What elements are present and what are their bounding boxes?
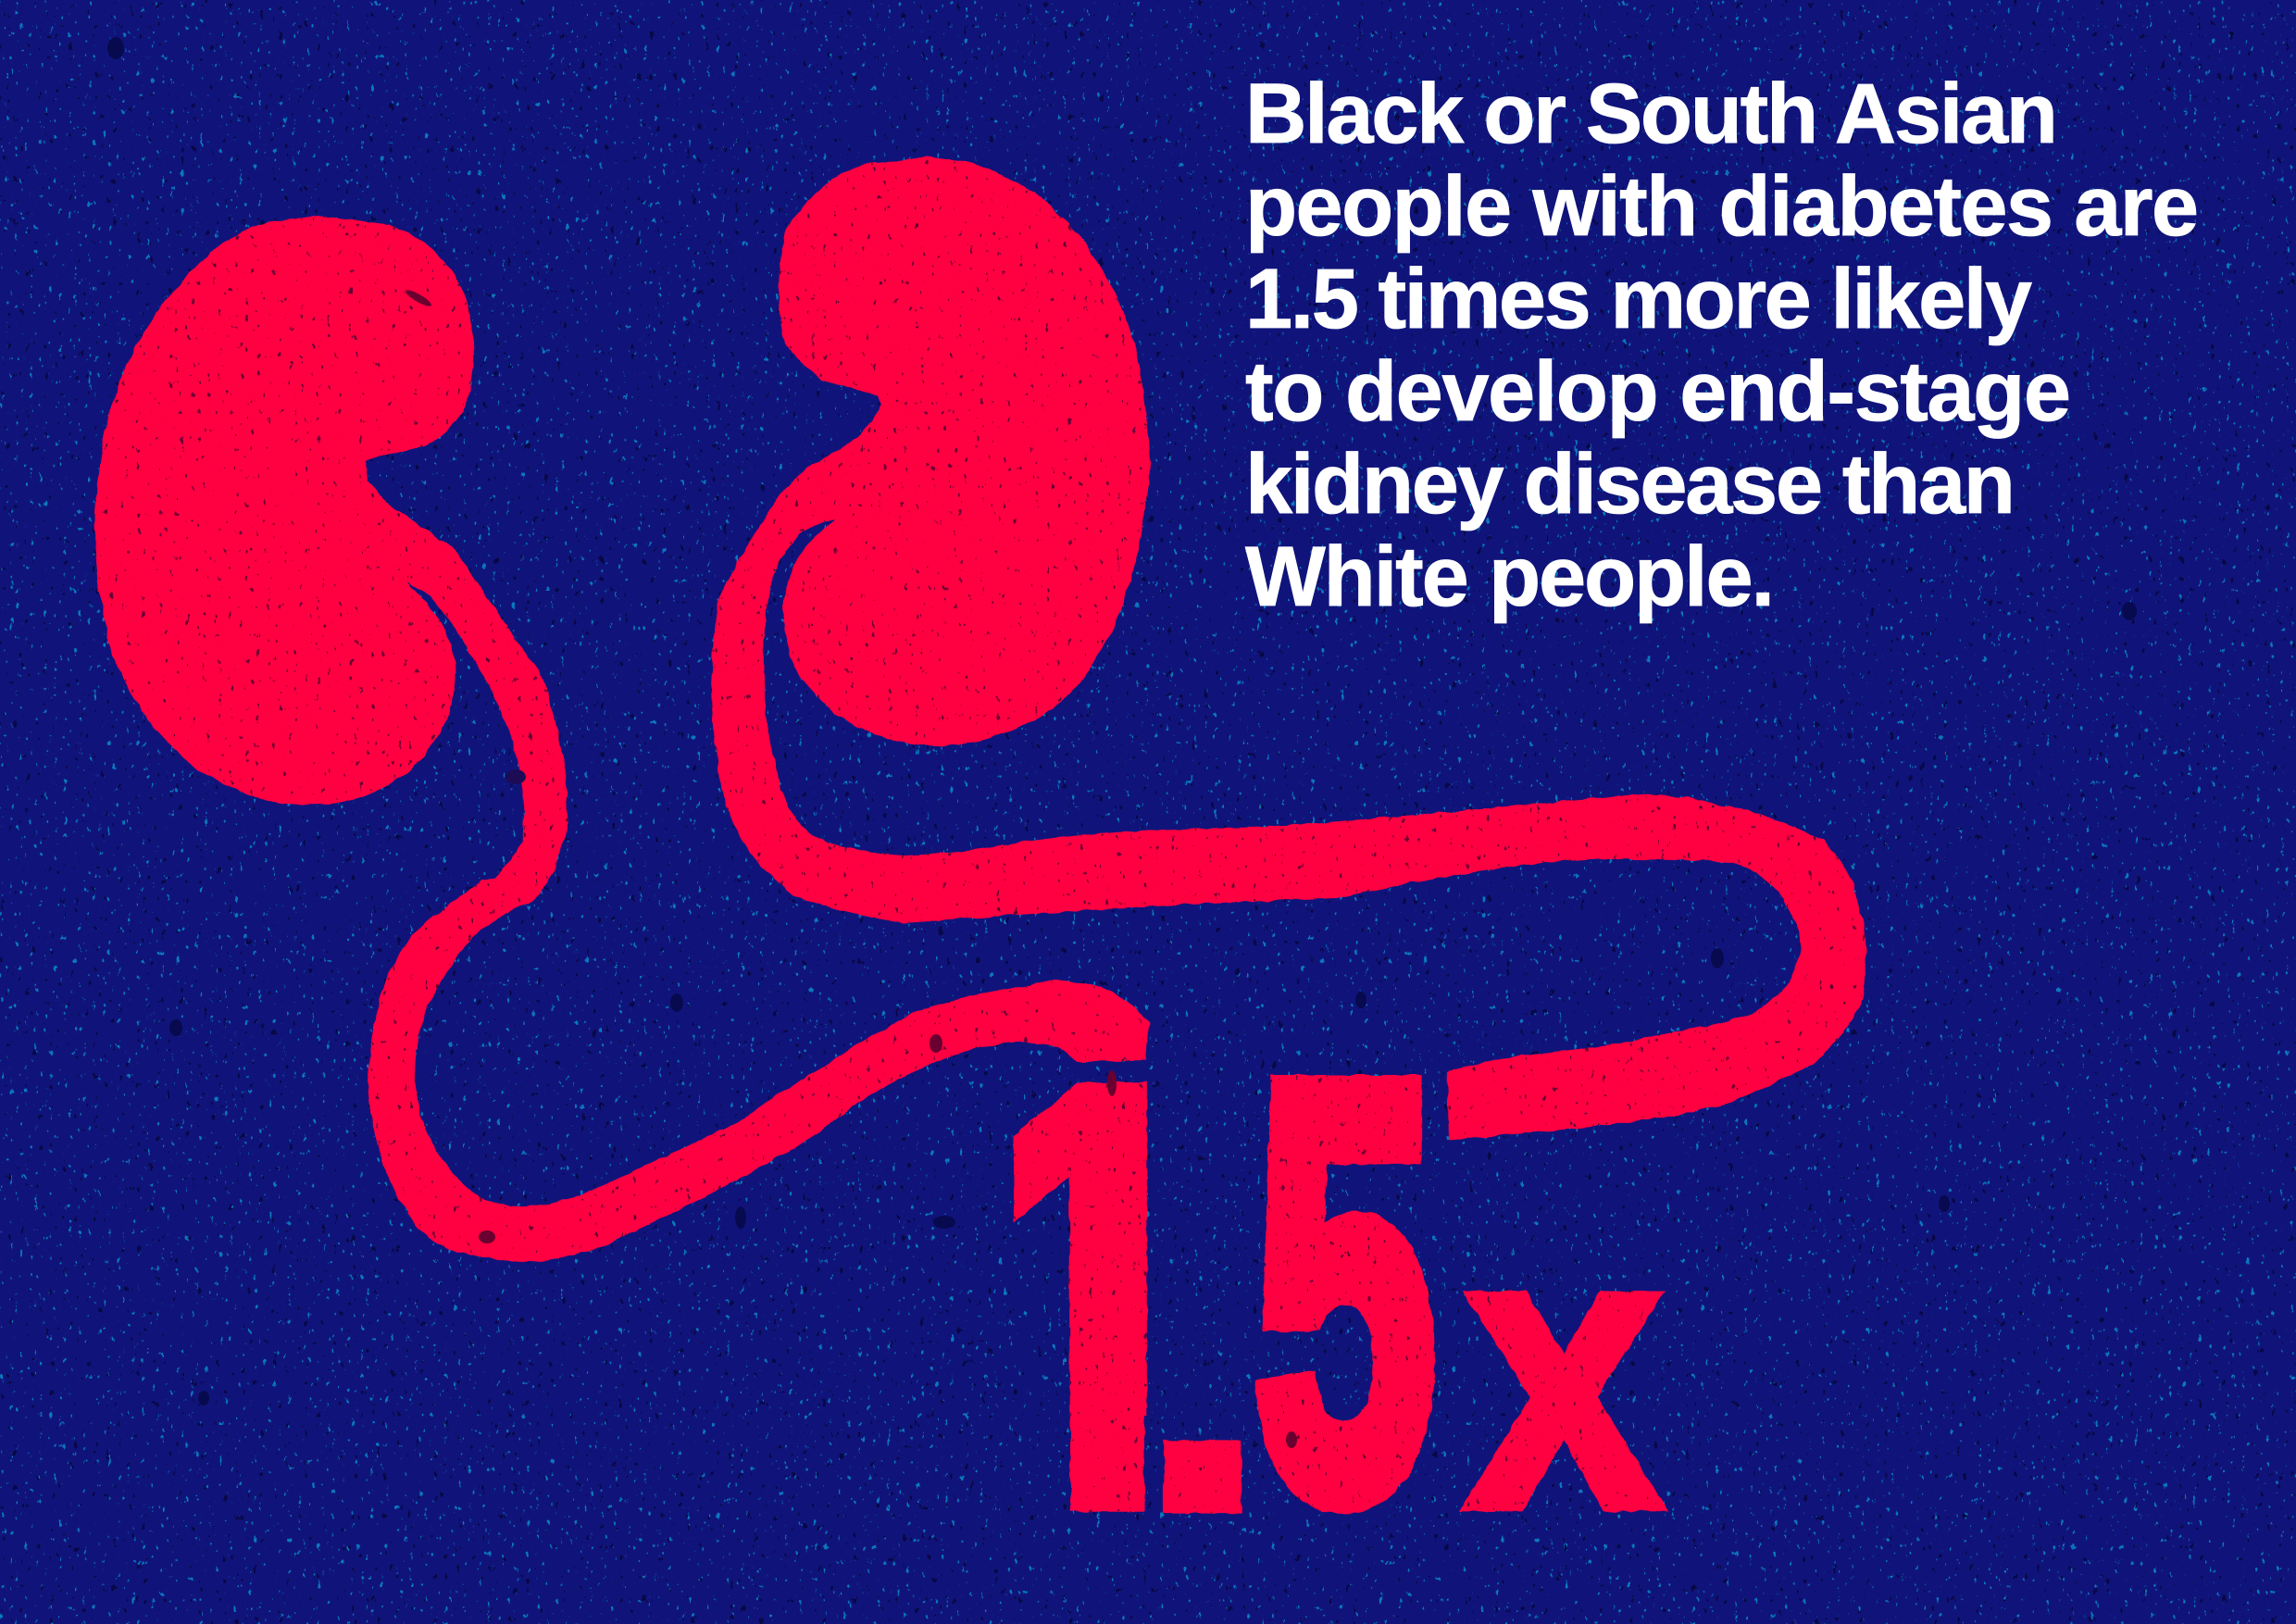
icon: right kidney with long ureter [711, 156, 1866, 1140]
text line 3: 1.5 times more likely [1245, 252, 2032, 346]
big number: decimal point: . [1140, 1138, 1266, 1594]
big number: 5: 5 [1254, 962, 1436, 1618]
illustration: kidneys, ureters and 1.5x figure [94, 156, 1866, 1624]
text line 5: kidney disease than [1245, 437, 2015, 531]
text line 2: people with diabetes are [1245, 159, 2199, 254]
big number: multiplier x: x [1466, 1149, 1664, 1590]
text line 4: to develop end-stage [1245, 344, 2071, 439]
big number: 1: 1 [968, 962, 1226, 1624]
text line 1: Black or South Asian [1245, 67, 2058, 161]
text block: statement [1245, 67, 2199, 624]
text line 6: White people. [1245, 530, 1775, 624]
icon: left kidney with ureter [94, 216, 1149, 1262]
